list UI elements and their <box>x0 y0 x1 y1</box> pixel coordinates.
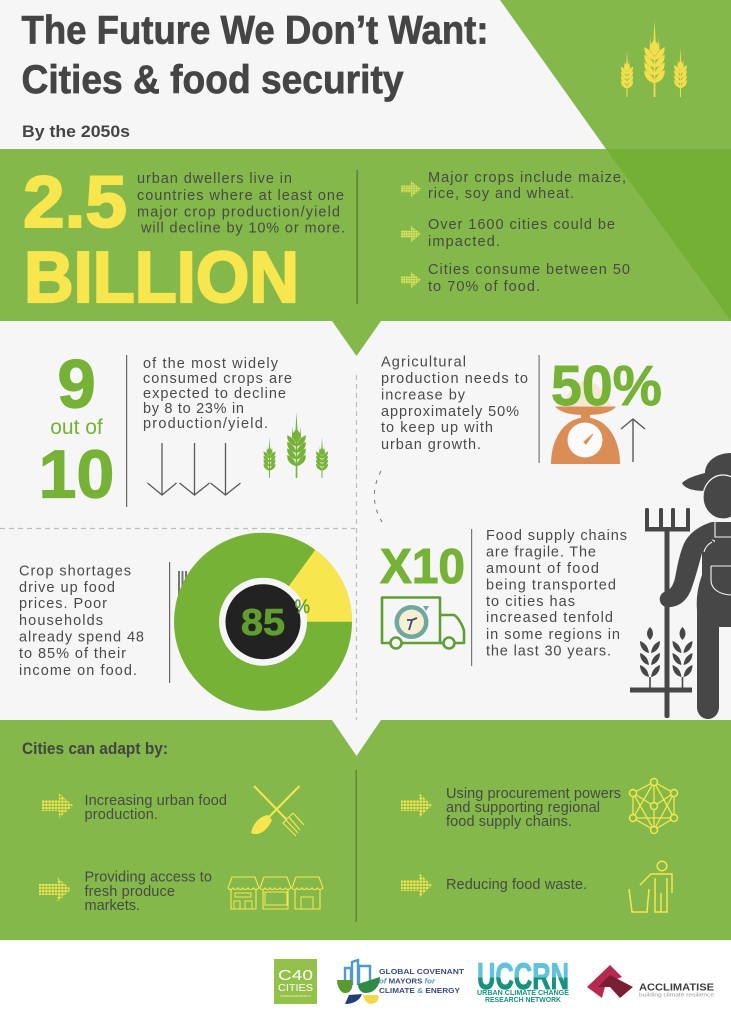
stat x10: X10 <box>380 540 465 594</box>
hidden bars behind pie <box>178 571 187 605</box>
icon: yellow wheat <box>621 20 687 97</box>
panel: header <box>22 0 731 321</box>
farmer hat <box>682 453 731 491</box>
crops text <box>143 356 292 432</box>
food supply text: the last 30 years. <box>486 644 611 660</box>
panel: cities can adapt <box>0 720 731 940</box>
adapt text 4: Reducing food waste. <box>446 877 587 893</box>
crop shortages text: drive up food <box>19 580 115 596</box>
icon: three down arrows <box>148 443 240 495</box>
arrow bullet 1 <box>401 181 421 197</box>
icon: person and bin <box>629 861 672 912</box>
band background <box>0 149 731 321</box>
agricultural text: to keep up with <box>381 420 493 436</box>
agricultural text: Agricultural <box>381 355 466 371</box>
agricultural text <box>381 355 528 453</box>
white pointer <box>332 720 381 756</box>
arrow 2 <box>39 877 71 902</box>
icon: up arrow <box>621 419 645 462</box>
bullet text 3: to 70% of food. <box>428 279 540 295</box>
stat 9 out of 10: 9 <box>57 346 96 422</box>
divider <box>471 529 472 666</box>
panel: 2.5 billion band <box>0 149 731 356</box>
adapt text 2: Providing access to <box>84 870 212 886</box>
adapt text 3: Using procurement powers <box>446 786 621 802</box>
bullet text 3 <box>428 262 630 295</box>
adapt text 2 <box>84 870 212 914</box>
heading: Cities can adapt by: <box>22 740 168 758</box>
pointer triangle <box>332 321 381 356</box>
stat 50 percent: 50% <box>551 354 662 418</box>
logo: C40 Cities <box>274 959 317 1004</box>
percent sign: % <box>294 597 310 618</box>
crops text: production/yield. <box>143 416 268 432</box>
overalls outline <box>704 522 731 595</box>
title <box>22 8 488 102</box>
divider <box>126 355 127 507</box>
food supply text: being transported <box>486 578 616 594</box>
adapt text 3: and supporting regional <box>446 800 600 816</box>
crop shortages text: already spend 48 <box>19 630 144 646</box>
icon: shovel and fork <box>251 786 304 836</box>
icon: green wheat <box>264 412 328 478</box>
bullet text 3: Cities consume between 50 <box>428 262 630 278</box>
panel: food supply chains <box>380 528 627 666</box>
food supply text: are fragile. The <box>486 544 596 560</box>
urban dwellers text <box>137 171 345 237</box>
divider <box>169 562 170 683</box>
logo: Global Covenant of Mayors: CLIMATE & ENERGY <box>379 986 460 995</box>
panel: 9 out of 10 <box>39 346 328 512</box>
food supply text: amount of food <box>486 561 599 577</box>
arrow 1 <box>42 793 73 818</box>
adapt text 3 <box>446 786 621 830</box>
crop shortages text: income on food. <box>19 663 137 679</box>
bullet text 2 <box>428 217 615 250</box>
crops text: of the most widely <box>143 356 279 372</box>
logo: UCCRN: RESEARCH NETWORK <box>485 995 562 1004</box>
panel: agricultural production <box>381 354 662 464</box>
adapt text 1 <box>84 793 227 823</box>
adapt text 3: food supply chains. <box>446 814 572 830</box>
logo: C40 Cities: CLIMATE LEADERSHIP GROUP <box>280 994 311 998</box>
agricultural text: increase by <box>381 388 466 404</box>
crop shortages text: to 85% of their <box>19 646 126 662</box>
crop shortages text: Crop shortages <box>19 564 131 580</box>
food supply text: increased tenfold <box>486 610 613 626</box>
stat 9 out of 10: out of <box>50 416 103 439</box>
urban dwellers text: will decline by 10% or more. <box>140 221 345 237</box>
logo: Acclimatise: ACCLIMATISE <box>639 982 714 994</box>
header green triangle <box>500 0 731 321</box>
title: Cities & food security <box>22 58 404 102</box>
food supply text: to cities has <box>486 594 575 610</box>
logo: Global Covenant of Mayors: of MAYORS for <box>379 976 436 986</box>
stat 9 out of 10 <box>39 346 114 512</box>
subtitle: By the 2050s <box>22 122 130 141</box>
icon: delivery truck <box>382 598 464 648</box>
adapt text 1: production. <box>84 807 158 823</box>
icon: network <box>630 778 678 834</box>
logo: Acclimatise: building climate resilience <box>639 992 714 998</box>
crops text: expected to decline <box>143 386 286 402</box>
logo: UCCRN <box>477 956 569 1004</box>
decorative dashed arc <box>374 471 382 522</box>
logo: C40 Cities: C40 <box>278 967 313 984</box>
adapt text 2: fresh produce <box>84 884 175 900</box>
urban dwellers text: countries where at least one <box>137 188 344 204</box>
icon: kitchen scale <box>551 381 620 464</box>
crops text: by 8 to 23% in <box>143 401 244 417</box>
adapt text 2: markets. <box>84 898 140 914</box>
arrow bullet 3 <box>401 272 421 288</box>
big word billion: BILLION <box>24 238 299 318</box>
food supply text <box>486 528 627 660</box>
logo: UCCRN: URBAN CLIMATE CHANGE <box>477 988 569 997</box>
divider <box>538 355 540 463</box>
panel: crop shortages <box>19 533 352 711</box>
title: The Future We Don’t Want: <box>22 8 488 52</box>
logo: UCCRN: UCCRN <box>477 956 569 997</box>
bullet text 1 <box>428 170 626 202</box>
arrow 3 <box>401 793 432 818</box>
donut chart 85 percent <box>174 533 352 711</box>
logo: Global Covenant of Mayors <box>337 960 464 1004</box>
urban dwellers text: major crop production/yield <box>137 204 340 220</box>
agricultural text: urban growth. <box>381 437 481 453</box>
food supply text: in some regions in <box>486 627 620 643</box>
logo: C40 Cities: CITIES <box>278 983 313 994</box>
bullet text 2: impacted. <box>428 234 500 250</box>
food supply text: Food supply chains <box>486 528 627 544</box>
illustration: farmer with pitchfork <box>630 453 731 719</box>
pitchfork <box>630 508 692 718</box>
bullet text 2: Over 1600 cities could be <box>428 217 615 233</box>
divider <box>356 770 357 922</box>
arrow bullet 2 <box>401 226 421 242</box>
crops text: consumed crops are <box>143 371 292 387</box>
agricultural text: production needs to <box>381 371 528 387</box>
farmer head <box>703 475 731 519</box>
divider <box>356 170 358 304</box>
stat 9 out of 10: 10 <box>39 436 114 512</box>
label 85: 85 <box>241 602 285 643</box>
wheat plants <box>640 627 692 690</box>
logo: Acclimatise <box>587 965 714 998</box>
panel: footer logos <box>0 940 731 1024</box>
icon: market stores <box>228 877 323 909</box>
agricultural text: approximately 50% <box>381 404 519 420</box>
bullet text 1: rice, soy and wheat. <box>428 186 574 202</box>
dashed section dividers <box>0 375 356 720</box>
crop shortages text: households <box>19 613 103 629</box>
panel background <box>0 720 731 940</box>
logo: Global Covenant of Mayors: GLOBAL COVENANT <box>379 967 464 976</box>
crop shortages text <box>19 564 144 679</box>
big number 2.5: 2.5 <box>23 162 127 243</box>
adapt text 1: Increasing urban food <box>84 793 227 809</box>
farmer body <box>660 522 731 719</box>
arrow 4 <box>401 873 432 898</box>
bullet text 1: Major crops include maize, <box>428 170 626 186</box>
footer background <box>0 940 731 1024</box>
crop shortages text: prices. Poor <box>19 596 107 612</box>
band darker corner <box>606 149 731 321</box>
urban dwellers text: urban dwellers live in <box>137 171 292 187</box>
